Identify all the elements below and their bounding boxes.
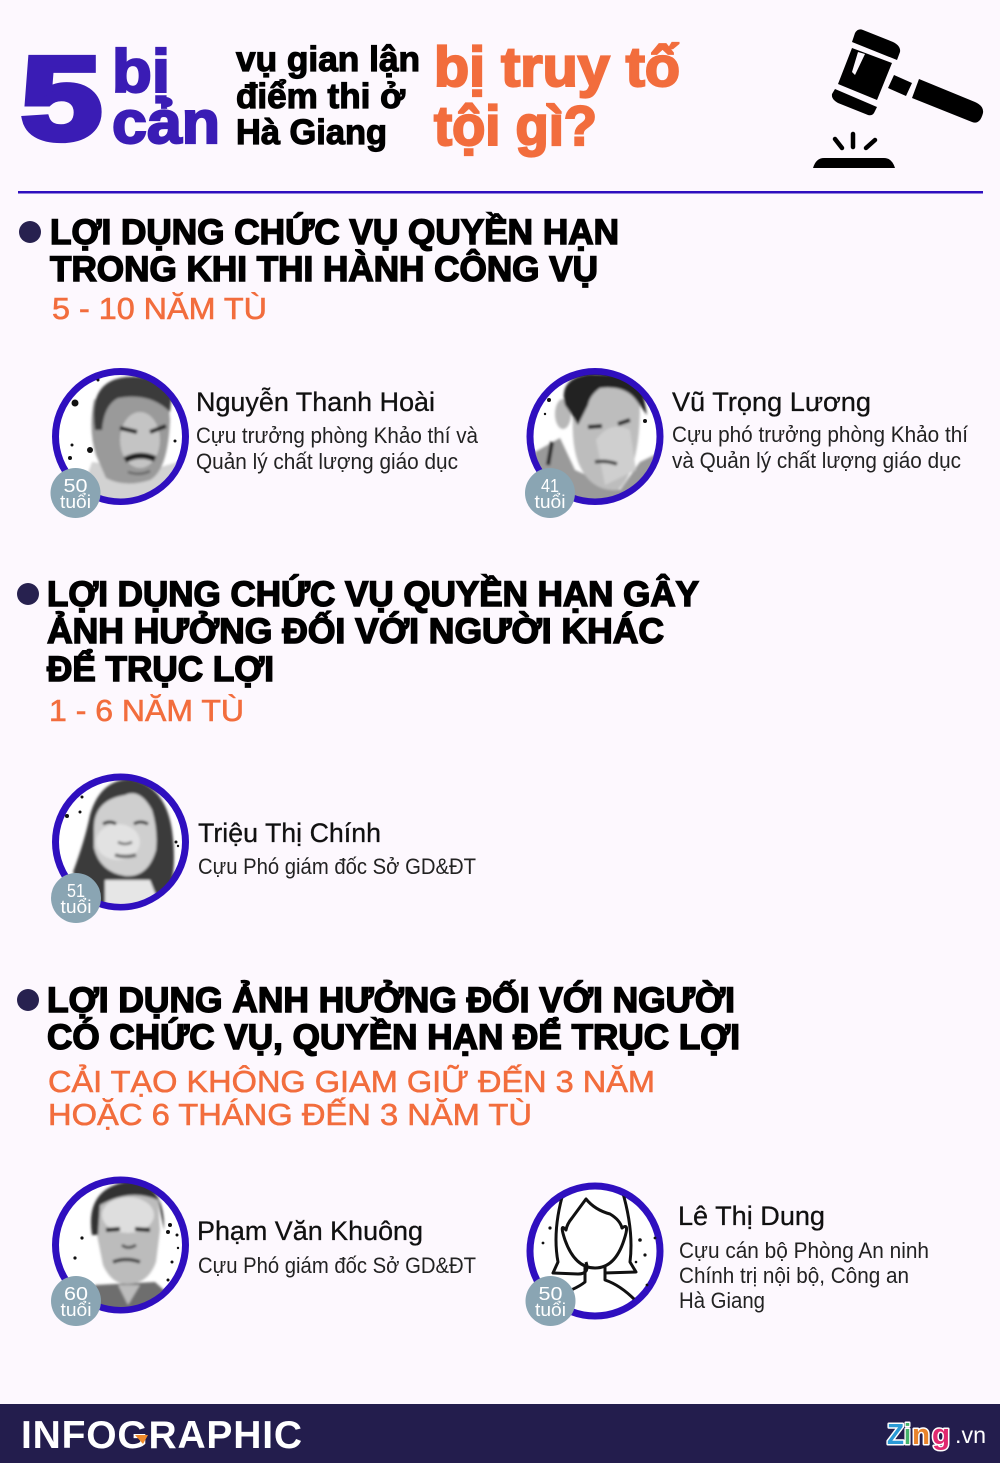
- panel: section 2 heading: [17, 574, 699, 728]
- title: [21, 33, 680, 165]
- title: 5 bị can: [21, 33, 220, 165]
- logo: Zing.vn: i: [904, 1419, 911, 1451]
- name: Triệu Thị Chính: [198, 818, 381, 848]
- age badge: tuổi: [535, 1300, 566, 1320]
- logo: Zing.vn: .vn: [955, 1422, 986, 1448]
- age badge: 60: [64, 1284, 88, 1304]
- age badge: tuổi: [534, 492, 566, 512]
- age badge: tuổi: [60, 897, 92, 917]
- age badge: 50: [64, 476, 88, 496]
- age badge: [51, 873, 101, 923]
- heading text: LỢI DỤNG ẢNH HƯỞNG ĐỐI VỚI NGƯỜI: [47, 980, 735, 1020]
- panel: Phạm Văn Khuông: [51, 1180, 476, 1326]
- portrait placeholder: [530, 1186, 660, 1320]
- heading text: [47, 574, 699, 689]
- portrait: [56, 372, 186, 510]
- title: 5 bị can: bị: [112, 38, 170, 105]
- title: vụ gian lận điểm thi ở Hà Giang: vụ gian lận: [236, 40, 420, 79]
- title: bị truy tố tội gì?: [434, 35, 680, 157]
- title: vụ gian lận điểm thi ở Hà Giang: [236, 40, 420, 152]
- portrait: [530, 372, 665, 510]
- role: và Quản lý chất lượng giáo dục: [672, 448, 961, 473]
- heading text: [47, 980, 740, 1057]
- age badge: [51, 1276, 101, 1326]
- age badge: 51: [67, 881, 85, 901]
- divider line: [18, 191, 983, 194]
- age badge: tuổi: [60, 492, 91, 512]
- logo: Zing.vn: n: [912, 1419, 930, 1451]
- name: Lê Thị Dung: [678, 1201, 825, 1231]
- title: 5 bị can: cản: [112, 89, 220, 156]
- age badge: 50: [538, 1284, 562, 1304]
- penalty: 5 - 10 NĂM TÙ: [52, 291, 267, 326]
- age badge: 41: [541, 476, 559, 496]
- age badge: tuổi: [60, 1300, 92, 1320]
- role: Cựu Phó giám đốc Sở GD&ĐT: [198, 1253, 476, 1278]
- penalty: [48, 1064, 655, 1132]
- footer label: INFOGRAPHIC: INFOGRAPHIC: [21, 1414, 302, 1457]
- panel: section 3 heading: [17, 980, 740, 1132]
- age badge: [50, 468, 100, 518]
- panel: Lê Thị Dung: [526, 1186, 929, 1326]
- footer: [0, 1404, 1000, 1463]
- role: Chính trị nội bộ, Công an: [679, 1263, 909, 1288]
- role: [672, 422, 968, 473]
- title: bị truy tố tội gì?: bị truy tố: [434, 35, 680, 98]
- penalty: CẢI TẠO KHÔNG GIAM GIỮ ĐẾN 3 NĂM: [48, 1064, 655, 1099]
- name: Phạm Văn Khuông: [197, 1216, 423, 1246]
- icon: gavel: [813, 29, 983, 168]
- heading text: ĐỂ TRỤC LỢI: [47, 649, 274, 689]
- logo: Zing.vn: g: [932, 1419, 950, 1451]
- heading text: LỢI DỤNG CHỨC VỤ QUYỀN HẠN GÂY: [47, 574, 699, 614]
- bullet: [19, 221, 41, 243]
- role: [196, 423, 479, 474]
- panel: Triệu Thị Chính: [51, 777, 476, 923]
- title: bị truy tố tội gì?: tội gì?: [434, 94, 597, 157]
- heading text: TRONG KHI THI HÀNH CÔNG VỤ: [50, 249, 598, 289]
- title: vụ gian lận điểm thi ở Hà Giang: Hà Giang: [236, 113, 387, 152]
- bullet: [17, 989, 39, 1011]
- penalty: 1 - 6 NĂM TÙ: [49, 693, 244, 728]
- heading text: CÓ CHỨC VỤ, QUYỀN HẠN ĐỂ TRỤC LỢI: [47, 1017, 740, 1057]
- portrait: [56, 1180, 186, 1320]
- penalty: HOẶC 6 THÁNG ĐẾN 3 NĂM TÙ: [48, 1097, 532, 1132]
- portrait: [56, 777, 186, 907]
- heading text: LỢI DỤNG CHỨC VỤ QUYỀN HẠN: [50, 212, 619, 252]
- logo: Zing.vn: [887, 1419, 986, 1451]
- panel: section 1 heading: [19, 212, 619, 326]
- name: Vũ Trọng Lương: [672, 387, 871, 417]
- heading text: ẢNH HƯỞNG ĐỐI VỚI NGƯỜI KHÁC: [47, 611, 664, 651]
- heading text: [50, 212, 619, 289]
- role: Cựu trưởng phòng Khảo thí và: [196, 423, 479, 448]
- panel: Nguyễn Thanh Hoài: [50, 372, 479, 518]
- role: Cựu Phó giám đốc Sở GD&ĐT: [198, 854, 476, 879]
- logo: Zing.vn: Z: [887, 1419, 904, 1451]
- panel: Vũ Trọng Lương: [525, 372, 968, 518]
- title: 5 bị can: 5: [21, 33, 102, 165]
- age badge: [526, 1276, 576, 1326]
- age badge: [525, 468, 575, 518]
- bullet: [17, 583, 39, 605]
- role: Cựu phó trưởng phòng Khảo thí: [672, 422, 968, 447]
- role: Quản lý chất lượng giáo dục: [196, 449, 458, 474]
- role: [679, 1238, 929, 1313]
- title: vụ gian lận điểm thi ở Hà Giang: điểm thi ở: [236, 77, 405, 116]
- name: Nguyễn Thanh Hoài: [196, 386, 435, 417]
- role: Hà Giang: [679, 1288, 765, 1313]
- role: Cựu cán bộ Phòng An ninh: [679, 1238, 929, 1263]
